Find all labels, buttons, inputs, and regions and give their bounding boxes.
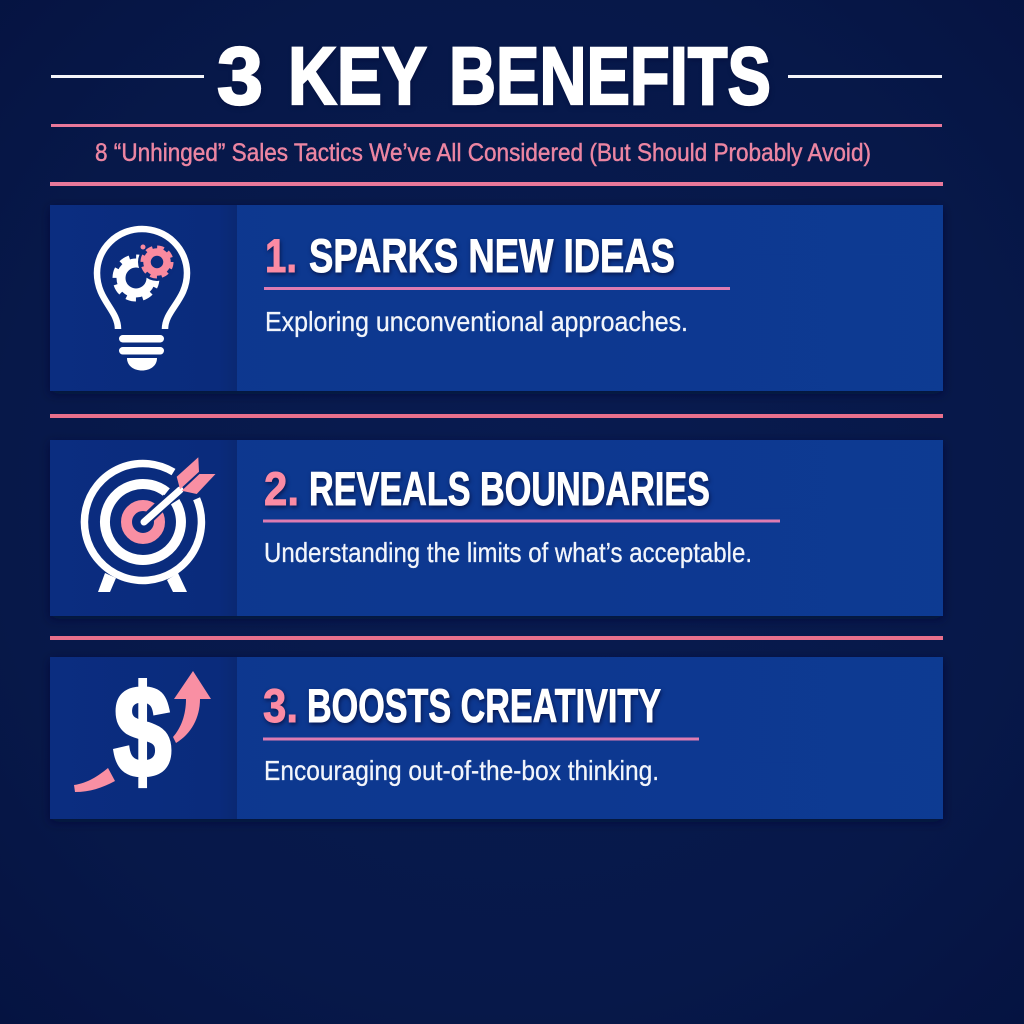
subtitle band: 8 “Unhinged” Sales Tactics We’ve All Considered (But Should Probably Avoid) bbox=[95, 139, 871, 167]
heading: sparks new ideas: SPARKS NEW IDEAS bbox=[309, 229, 675, 282]
icon: dollar with rising arrow bbox=[74, 658, 211, 804]
heading: reveals boundaries: REVEALS BOUNDARIES bbox=[309, 462, 710, 515]
icon: target with dart bbox=[84, 457, 215, 592]
description: Encouraging out-of-the-box thinking. bbox=[264, 755, 659, 786]
heading: boosts creativity: 3. bbox=[263, 679, 298, 732]
icon: light bulb with gears bbox=[97, 229, 187, 370]
icon: dollar with rising arrow: $ bbox=[114, 658, 171, 804]
panel: benefit 3 bbox=[50, 657, 943, 819]
panel: benefit 2 bbox=[50, 440, 943, 616]
title with side rules: 3 bbox=[217, 31, 263, 122]
heading: boosts creativity bbox=[263, 679, 661, 732]
title with side rules: KEY bbox=[288, 31, 427, 122]
description: Understanding the limits of what’s acceptable. bbox=[264, 537, 752, 568]
title with side rules bbox=[51, 31, 942, 122]
heading: reveals boundaries bbox=[264, 462, 710, 515]
panel: benefit 1 bbox=[50, 205, 943, 391]
heading: boosts creativity: BOOSTS CREATIVITY bbox=[307, 679, 661, 732]
title with side rules: BENEFITS bbox=[449, 31, 771, 122]
heading: sparks new ideas: 1. bbox=[265, 229, 297, 282]
description: Exploring unconventional approaches. bbox=[265, 306, 688, 337]
heading: reveals boundaries: 2. bbox=[264, 462, 299, 515]
subtitle band bbox=[50, 124, 943, 186]
